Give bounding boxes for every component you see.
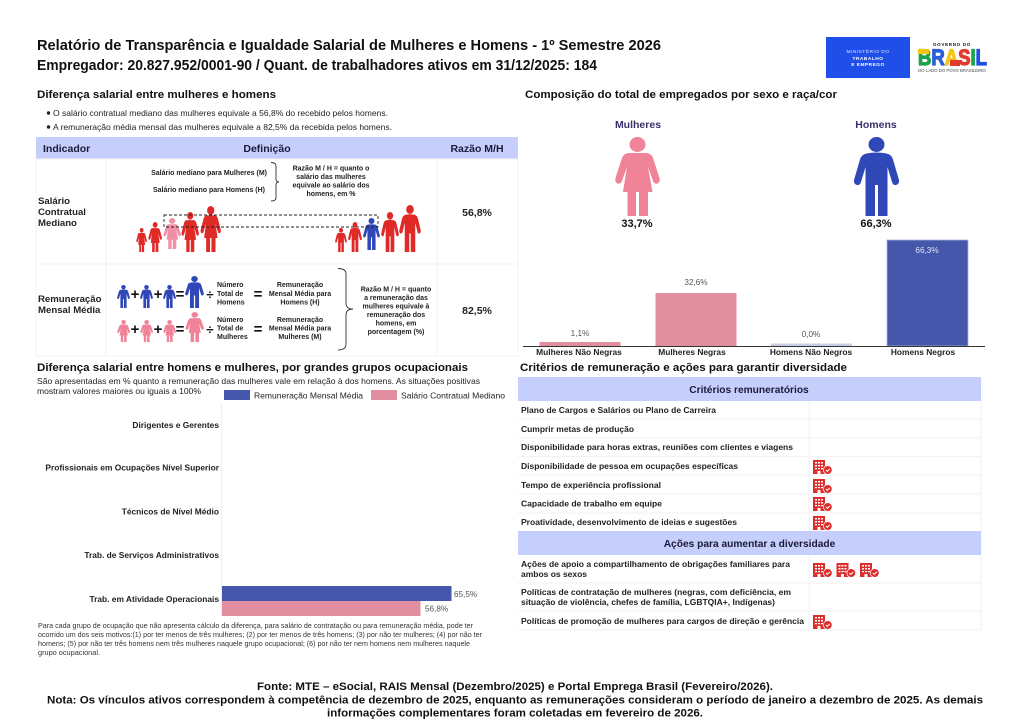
section header: ações: Ações para aumentar a diversidade	[664, 539, 836, 550]
formula: mulheres: ÷	[206, 322, 214, 337]
table header: Razão M/H	[450, 143, 504, 155]
title	[37, 38, 661, 74]
formula: mulheres: +	[154, 321, 163, 338]
formula: homens: +	[154, 286, 163, 303]
row label: remuneração mensal média: Mensal Média	[38, 305, 101, 316]
formula: homens: Mensal Média para	[269, 291, 331, 298]
bar chart: grupos ocupacionais: Dirigentes e Gerentes	[132, 420, 219, 430]
bar chart: grupos ocupacionais	[45, 404, 477, 617]
row label: salário contratual mediano: Contratual	[38, 207, 86, 218]
panel: indicator table: 56,8%	[462, 207, 493, 219]
legend: Remuneração Mensal Média	[254, 390, 363, 400]
section header: critérios remuneratórios	[518, 377, 981, 401]
bullet list: O salário contratual mediano das mulheres equivale a 56,8% do recebido pelos homens.	[53, 108, 388, 118]
heading: critérios: Critérios de remuneração e ações para garantir diversidade	[520, 362, 847, 374]
definition text: salário mediano: Razão M / H = quanto o	[293, 166, 369, 172]
bar chart: composição: 1,1%	[571, 329, 589, 338]
action rows: Políticas de contratação de mulheres (negras, com deficiência, em	[521, 588, 791, 597]
formula: homens: ÷	[206, 287, 214, 302]
formula: mulheres: Remuneração	[277, 317, 323, 324]
logo: Governo do Brasil: BRASIL	[918, 45, 987, 70]
row label: salário contratual mediano: Salário	[38, 196, 70, 207]
heading: diferença por grupos: Diferença salarial entre homens e mulheres, por grandes grupos ocupacionais	[37, 362, 468, 374]
formula: homens: Remuneração	[277, 282, 323, 289]
action rows	[521, 560, 805, 626]
footnote: grupo ocupacional.	[38, 648, 100, 657]
formula: homens: Homens	[217, 300, 245, 306]
pictogram: mulheres: Mulheres	[615, 119, 661, 131]
footer note: Nota: Os vínculos ativos correspondem à competência de dezembro de 2025, enquanto as remunerações consideram o período de janeiro a dezembro de 2025. As demais	[47, 694, 983, 706]
bar chart: grupos ocupacionais: 65,5%	[454, 590, 477, 599]
formula: mulheres: =	[176, 321, 185, 338]
icons: men line-up	[335, 205, 421, 252]
bar chart: grupos ocupacionais: Trab. de Serviços Administrativos	[84, 550, 219, 560]
chart description: São apresentadas em % quanto a remuneração das mulheres vale em relação à dos homens. As situações positivas	[37, 376, 480, 386]
pictogram: mulheres: 33,7%	[621, 218, 653, 230]
formula: mulheres: Total de	[217, 326, 243, 332]
criteria rows: Cumprir metas de produção	[521, 425, 634, 434]
bar chart: grupos ocupacionais: Técnicos de Nível Médio	[122, 506, 219, 516]
formula: mulheres: Mensal Média para	[269, 326, 331, 332]
formula: mulheres	[117, 312, 331, 342]
pictogram: homens: Homens	[855, 119, 897, 131]
brace and ratio note: a remuneração das	[364, 295, 428, 302]
panel: indicator table: 82,5%	[462, 305, 493, 317]
formula: mulheres: +	[131, 321, 140, 338]
bar chart: composição: Homens Negros	[891, 347, 955, 357]
formula: homens: Homens (H)	[280, 300, 320, 306]
footer note	[47, 681, 983, 720]
brace and ratio note	[338, 268, 431, 350]
heading: composição: Composição do total de empregados por sexo e raça/cor	[525, 89, 838, 101]
footnote	[38, 621, 483, 657]
row label: remuneração mensal média: Remuneração	[38, 294, 102, 305]
table header: Definição	[243, 143, 291, 155]
bar chart: grupos ocupacionais: 56,8%	[425, 604, 448, 614]
footnote: homens; (5) por não ter três homens nem três mulheres naquele grupo ocupacional; (6) por não ter nem homens nem mulheres naquele	[38, 639, 470, 648]
action rows: Ações de apoio a compartilhamento de obrigações familiares para	[521, 560, 791, 569]
brace and ratio note: remuneração dos	[367, 312, 425, 319]
legend: Salário Contratual Mediano	[401, 390, 505, 400]
table header	[43, 143, 504, 155]
pictogram: homens	[854, 119, 899, 230]
bar chart: composição: 66,3%	[915, 246, 939, 255]
formula: homens: =	[254, 286, 263, 303]
icons: women line-up	[136, 206, 221, 252]
footnote: ocorrido um dos seis motivos:(1) por ter menos de três mulheres; (2) por ter menos de três homens; (3) por não ter mulheres; (4) por não ter	[38, 630, 483, 639]
bar chart: grupos ocupacionais: Profissionais em Ocupações Nível Superior	[45, 462, 220, 472]
bar chart: composição: 32,6%	[684, 278, 708, 287]
brace and ratio note: homens, em	[376, 320, 416, 328]
logo: Ministério do Trabalho e Emprego: MINISTÉRIO DO	[846, 48, 890, 55]
title: Empregador: 20.827.952/0001-90 / Quant. de trabalhadores ativos em 31/12/2025: 184	[37, 58, 597, 74]
row label: remuneração mensal média	[38, 294, 102, 316]
definition text: salário mediano: equivale ao salário dos	[292, 182, 370, 190]
icons: action companies	[813, 563, 880, 630]
formula: homens: +	[131, 286, 140, 303]
bar chart: composição: Mulheres Negras	[658, 347, 726, 357]
bar chart: composição	[523, 240, 985, 357]
section header: ações	[518, 531, 981, 555]
table header: Indicador	[43, 143, 90, 155]
footer note: Fonte: MTE – eSocial, RAIS Mensal (Dezembro/2025) e Portal Emprega Brasil (Fevereiro/2026).	[257, 681, 773, 693]
logo: Ministério do Trabalho e Emprego: TRABALHO	[853, 56, 883, 62]
logo: Governo do Brasil: GOVERNO DO	[933, 42, 971, 47]
formula: homens: Número	[217, 282, 243, 289]
criteria rows: Proatividade, desenvolvimento de ideias e sugestões	[521, 518, 738, 527]
pictogram: mulheres	[615, 119, 661, 230]
heading: diferença salarial: Diferença salarial entre mulheres e homens	[37, 89, 276, 101]
brace and ratio note: mulheres equivale à	[363, 304, 430, 310]
action rows: situação de violência, chefes de família, LGBTQIA+, Indígenas)	[521, 598, 775, 607]
logo: Governo do Brasil: DO LADO DO POVO BRASILEIRO	[918, 68, 986, 73]
action rows: ambos os sexos	[521, 570, 588, 579]
action rows: Políticas de promoção de mulheres para cargos de direção e gerência	[521, 617, 805, 626]
criteria rows: Plano de Cargos e Salários ou Plano de Carreira	[521, 406, 717, 415]
legend	[224, 390, 505, 400]
section header: critérios remuneratórios: Critérios remuneratórios	[689, 385, 809, 396]
definition text: salário mediano: salário das mulheres	[296, 174, 366, 181]
bar chart: composição: Mulheres Não Negras	[536, 347, 622, 357]
row label: salário contratual mediano: Mediano	[38, 218, 77, 229]
title: Relatório de Transparência e Igualdade Salarial de Mulheres e Homens - 1º Semestre 2026	[37, 38, 661, 54]
chart description	[37, 376, 480, 396]
criteria rows: Capacidade de trabalho em equipe	[521, 500, 663, 508]
definition text: salário mediano: homens, em %	[306, 191, 356, 198]
criteria rows: Disponibilidade para horas extras, reuniões com clientes e viagens	[521, 443, 794, 452]
formula: homens	[117, 276, 331, 308]
formula: homens: Total de	[217, 291, 243, 298]
formula: mulheres: Mulheres (M)	[278, 334, 322, 341]
formula: mulheres: Mulheres	[217, 334, 248, 341]
definition text: salário mediano	[151, 162, 370, 201]
chart description: mostram valores maiores ou iguais a 100%	[37, 386, 202, 396]
formula: mulheres: Número	[217, 317, 243, 324]
panel: indicator table	[36, 137, 518, 356]
brace and ratio note: porcentagem (%)	[368, 329, 424, 336]
bar chart: composição: Homens Não Negros	[770, 347, 853, 357]
footer note: informações complementares foram coletadas em fevereiro de 2026.	[327, 708, 703, 720]
footnote: Para cada grupo de ocupação que não apresenta cálculo da diferença, para salário de contratação ou para remuneração média, pode ter	[38, 621, 474, 630]
pictogram: homens: 66,3%	[860, 218, 892, 230]
criteria rows	[521, 406, 794, 527]
bullet list	[47, 108, 392, 132]
panel: critérios table	[518, 377, 981, 630]
logo: Ministério do Trabalho e Emprego	[826, 37, 910, 78]
definition text: salário mediano: Salário mediano para Mulheres (M)	[151, 170, 267, 177]
bullet list: A remuneração média mensal das mulheres equivale a 82,5% da recebida pelos homens.	[53, 122, 392, 132]
definition text: salário mediano: Salário mediano para Homens (H)	[153, 187, 265, 194]
bar chart: grupos ocupacionais: Trab. em Atividade Operacionais	[89, 594, 219, 604]
brace and ratio note: Razão M / H = quanto	[361, 286, 431, 294]
criteria rows: Tempo de experiência profissional	[521, 481, 661, 490]
formula: mulheres: =	[254, 321, 263, 338]
icons: criteria companies	[813, 460, 832, 531]
criteria rows: Disponibilidade de pessoa em ocupações específicas	[521, 462, 739, 471]
row label: salário contratual mediano	[38, 196, 86, 229]
logo: Ministério do Trabalho e Emprego: E EMPREGO	[851, 62, 885, 68]
bar chart: composição: 0,0%	[802, 330, 820, 339]
formula: homens: =	[176, 286, 185, 303]
